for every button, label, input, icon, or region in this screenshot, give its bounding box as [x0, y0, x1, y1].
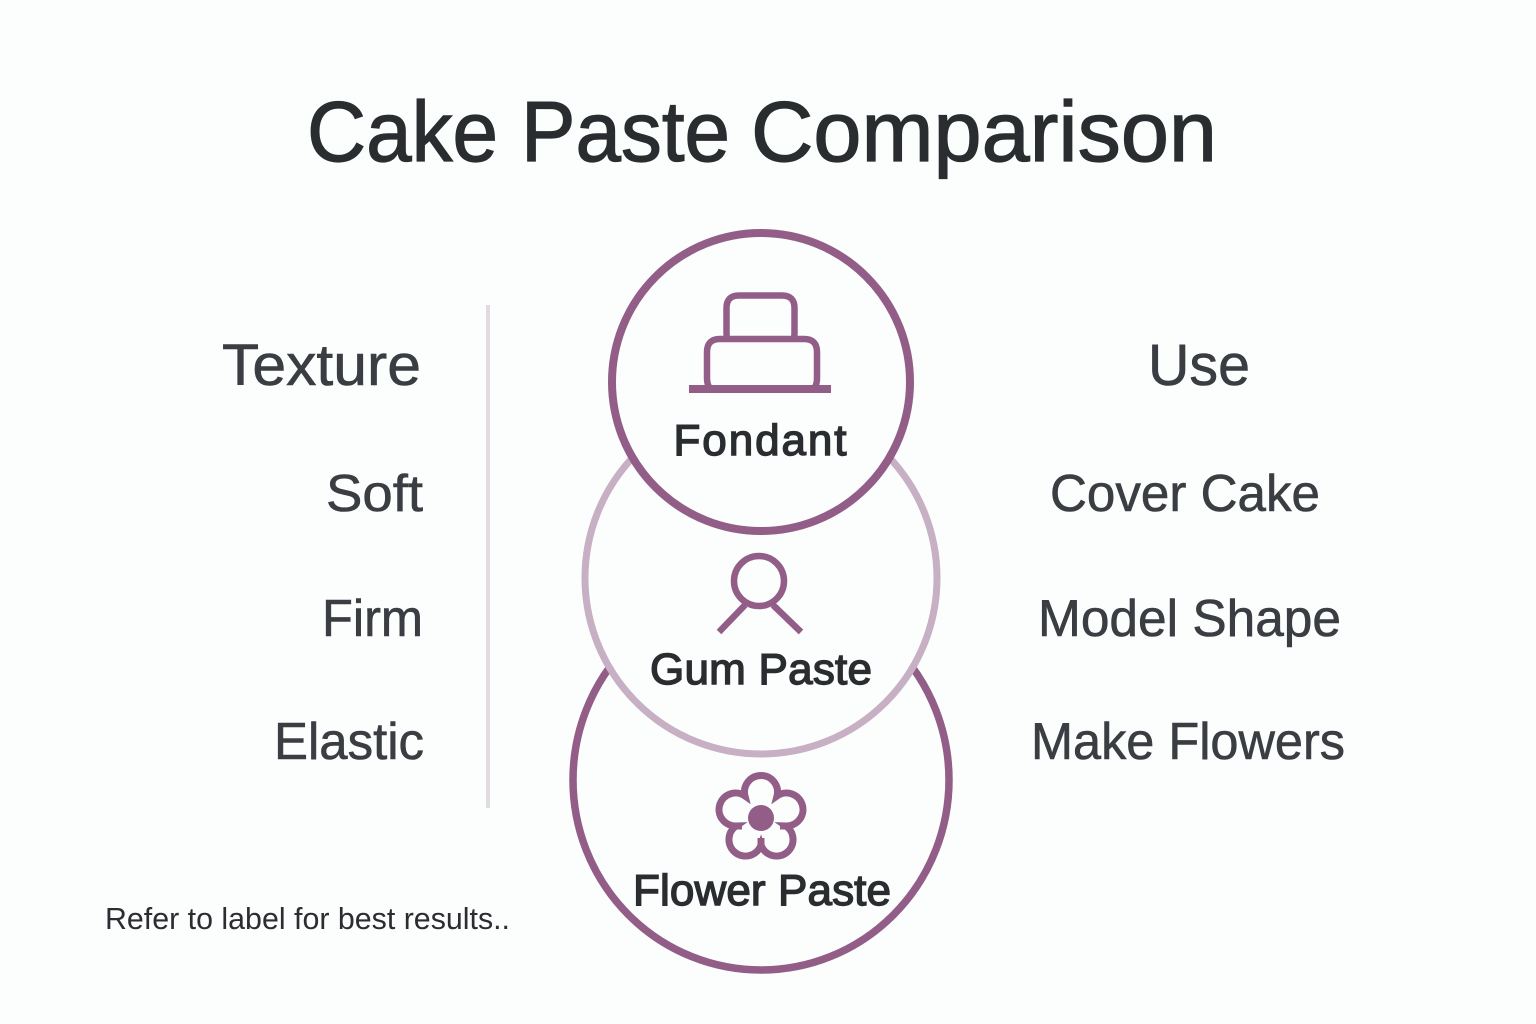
circle: flower paste: [573, 590, 949, 970]
text: Elastic: Elastic: [274, 713, 424, 771]
icon: cake: [689, 296, 831, 389]
text: Firm: Firm: [322, 590, 423, 648]
title: Paste: [521, 85, 730, 180]
icon: gum paste tool: [719, 556, 801, 632]
circle: gum paste: [585, 402, 937, 754]
heading: Texture: Texture: [222, 333, 421, 398]
column: texture: [222, 333, 424, 771]
label: Gum Paste: Gum Paste: [650, 645, 872, 694]
label: Flower Paste: Flower Paste: [633, 866, 891, 915]
heading: Use: Use: [1148, 333, 1250, 398]
label: Fondant: Fondant: [674, 416, 846, 465]
title: Cake: [307, 85, 498, 180]
title: Comparison: [751, 85, 1217, 180]
title: [307, 85, 1217, 180]
text: Soft: Soft: [326, 465, 424, 523]
text: Model Shape: Model Shape: [1038, 590, 1341, 648]
circle: fondant: [612, 233, 910, 531]
text: Make Flowers: Make Flowers: [1031, 713, 1345, 771]
column: use: [1031, 333, 1345, 771]
icon: flower: [719, 775, 803, 856]
footnote: Refer to label for best results..: [105, 901, 510, 936]
text: Cover Cake: Cover Cake: [1050, 465, 1320, 523]
vertical divider: [486, 305, 490, 808]
